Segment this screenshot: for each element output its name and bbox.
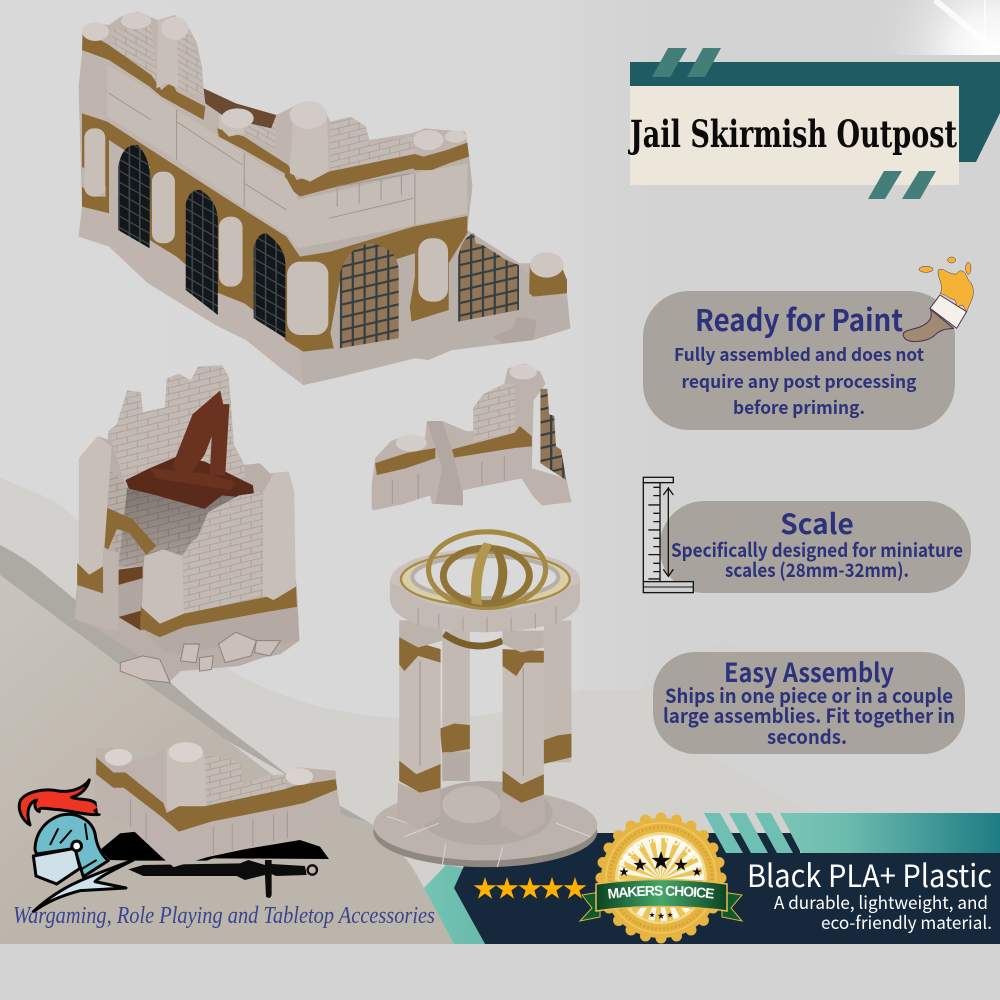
building silhouette <box>79 12 570 385</box>
panel: easy assembly <box>653 652 965 754</box>
navy banner body <box>454 833 1000 944</box>
helmet shading lines <box>50 823 97 870</box>
bottom banner <box>424 813 1000 944</box>
icon: paint brush <box>903 257 973 342</box>
tagline: Wargaming, Role Playing and Tabletop Accessories <box>13 903 435 929</box>
assembly description: seconds. <box>767 721 847 750</box>
wall bricks <box>205 756 287 805</box>
wall seams <box>131 800 287 854</box>
teal helmet <box>35 814 108 877</box>
material description: A durable, lightweight, and <box>774 890 988 915</box>
brick upper right wall <box>330 117 415 170</box>
black cape <box>100 832 329 862</box>
ring wall <box>390 580 580 632</box>
cornice seam lines <box>109 93 415 225</box>
right face tone <box>297 157 570 385</box>
front right column <box>501 649 546 837</box>
red plume <box>19 780 100 825</box>
teal chevron <box>424 865 485 944</box>
wall bronze <box>96 757 337 832</box>
premium quality text: PREMIUM QUALITY <box>618 835 704 868</box>
sword pommel <box>308 865 317 875</box>
wooden floor <box>125 456 255 509</box>
door jamb <box>75 549 119 631</box>
rubble <box>493 317 537 343</box>
paint description: before priming. <box>733 395 865 420</box>
fragment panel seams <box>392 456 504 504</box>
fragment bronze bands <box>375 426 532 475</box>
seal scalloped rim <box>601 818 721 938</box>
rotunda base <box>373 796 597 867</box>
interior panel <box>119 578 143 617</box>
wall pilaster <box>167 742 206 818</box>
armillary rings <box>429 532 546 608</box>
teal stripes <box>704 813 793 853</box>
ring block seams <box>418 607 556 632</box>
model: low ruined wall <box>94 742 342 867</box>
model: broken wall fragment <box>372 364 571 511</box>
base joints <box>387 816 590 867</box>
arch <box>102 505 156 554</box>
end post <box>529 253 567 297</box>
base step <box>418 781 552 845</box>
heading: easy assembly: Easy Assembly <box>724 653 894 690</box>
front left column <box>397 637 441 828</box>
silver visor <box>33 848 80 884</box>
ring inner opening <box>401 553 570 606</box>
icon: ruler <box>643 477 693 593</box>
snow caps <box>82 12 466 150</box>
stone cornice bands <box>107 65 467 248</box>
panel: scale <box>660 501 971 593</box>
brick upper walls <box>111 20 276 150</box>
upper accent stripes <box>652 48 721 77</box>
paint description: require any post processing <box>682 369 917 394</box>
seal black stars <box>619 851 702 919</box>
interior lower band and doorway <box>119 566 143 631</box>
ring front lip <box>390 583 580 632</box>
lower accent stripes <box>868 171 936 199</box>
fragment grille <box>540 389 566 480</box>
wing feathers <box>33 860 133 912</box>
upper bronze bands <box>82 30 469 197</box>
ribbon tails <box>580 892 742 921</box>
tower base <box>143 607 299 654</box>
front pilaster <box>141 549 184 631</box>
material description: eco-friendly material. <box>821 910 992 935</box>
model: ruined tower <box>74 365 299 683</box>
five star rating <box>474 877 586 899</box>
lower bronze walls <box>82 113 467 352</box>
panel: ready for paint <box>643 291 955 430</box>
teal gradient bar <box>780 813 1000 853</box>
makers choice seal <box>578 812 744 944</box>
sword <box>128 860 307 898</box>
interior shading <box>119 489 253 566</box>
ribbon band <box>596 880 727 911</box>
back columns <box>440 620 571 781</box>
paint description: Fully assembled and does not <box>674 342 925 367</box>
fragment collapsed stone <box>427 421 463 505</box>
fragment silhouette <box>372 364 571 511</box>
banner cream plate <box>630 86 959 185</box>
fallen beams <box>150 391 236 490</box>
heading: ready for paint: Ready for Paint <box>695 296 903 340</box>
light flare <box>870 0 1000 55</box>
fragment snow <box>396 434 427 451</box>
bronze bands <box>77 563 297 637</box>
armillary lower ring <box>444 634 503 646</box>
stone pilasters <box>84 17 448 335</box>
assembly description: Ships in one piece or in a couple <box>665 680 953 709</box>
ring capital supports <box>399 620 544 653</box>
banner teal backing <box>630 62 1000 162</box>
scale description: Specifically designed for miniature <box>671 536 963 563</box>
assembly description: large assemblies. Fit together in <box>663 700 955 729</box>
title banner <box>628 48 1000 199</box>
model: main jail building <box>79 12 570 385</box>
upper back brick wall <box>108 365 246 485</box>
seal rays <box>640 859 682 901</box>
ring top <box>391 549 580 611</box>
knight and sword logo <box>19 780 329 912</box>
right pilaster <box>263 472 296 600</box>
interior brick wall <box>103 465 253 566</box>
front stepped brick wall <box>182 492 265 617</box>
heading: scale: Scale <box>780 503 854 543</box>
wall snow <box>105 742 313 785</box>
makers choice text: MAKERS CHOICE <box>608 886 714 899</box>
window grilles <box>118 145 151 248</box>
tower silhouette <box>74 365 299 683</box>
wall silhouette <box>94 742 342 867</box>
model: rotunda with armillary sphere <box>373 532 597 867</box>
fragment bricks <box>473 384 515 441</box>
left pilaster <box>77 436 112 593</box>
visor pivot <box>70 840 83 852</box>
rubble <box>120 632 280 683</box>
collapsed roof timber <box>204 88 276 128</box>
scale description: scales (28mm-32mm). <box>725 556 909 583</box>
